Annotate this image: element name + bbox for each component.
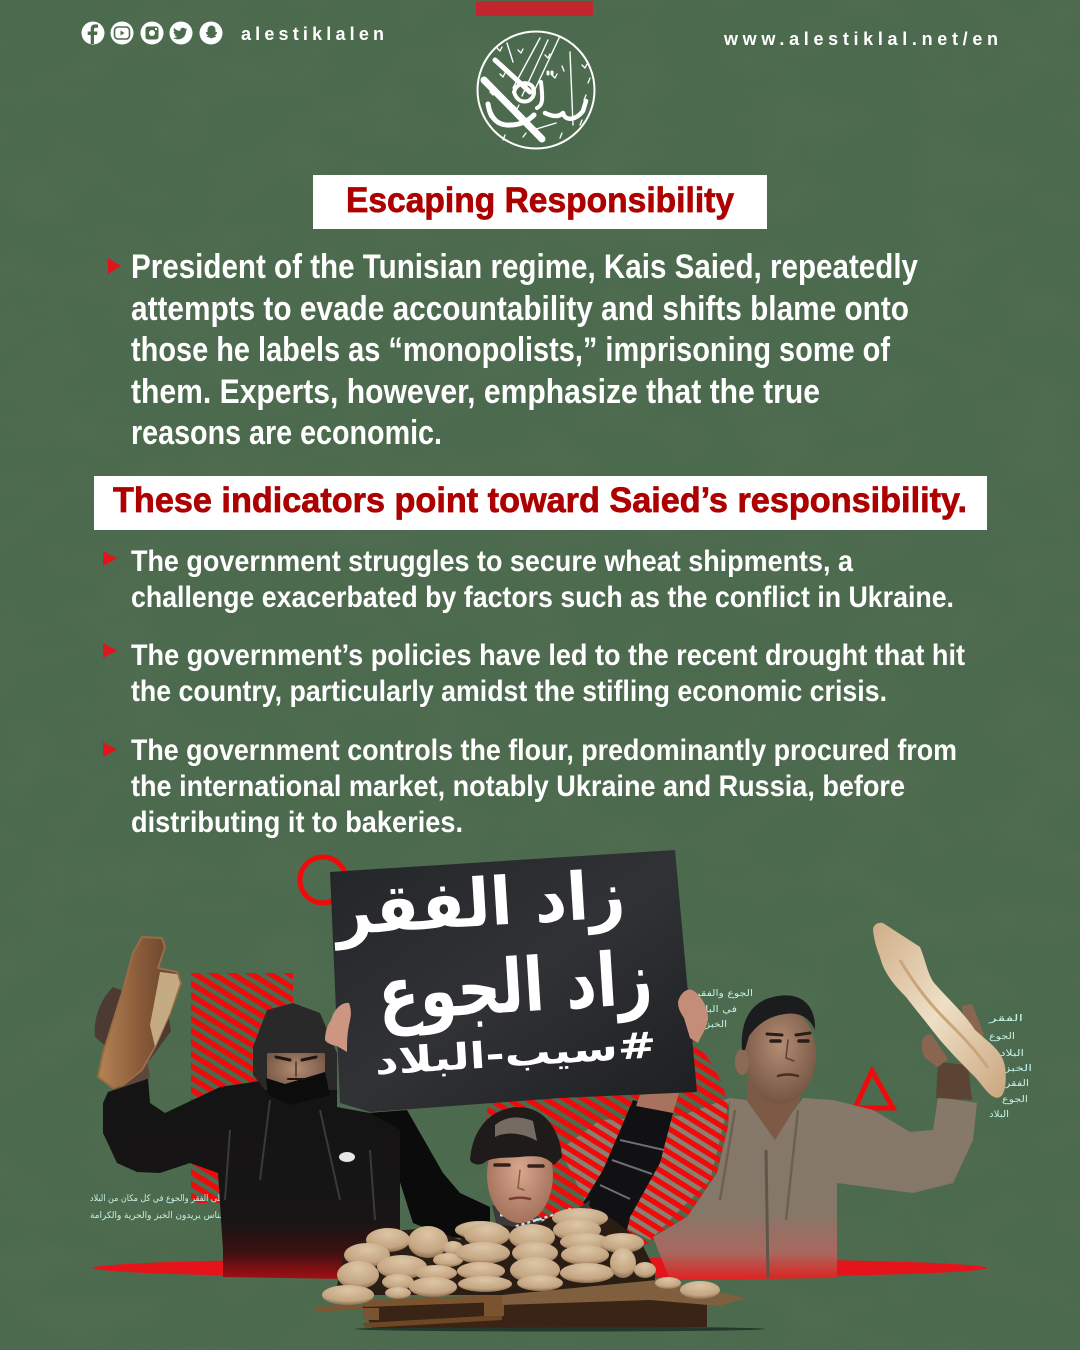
girl forearm	[636, 1090, 680, 1113]
paragraph text: them. Experts, however, emphasize that the true	[131, 373, 820, 411]
handwritten scribbles top right	[694, 989, 753, 1030]
bullet 1 text: The government struggles to secure wheat shipments, a	[131, 545, 853, 578]
bullet 3 text: the international market, notably Ukraine and Russia, before	[131, 770, 905, 803]
icon: facebook	[82, 22, 104, 44]
icon: bullet marker	[103, 742, 117, 757]
heading box: Escaping Responsibility	[313, 175, 767, 229]
protest sign: زاد الفقر	[330, 856, 627, 951]
paragraph text	[131, 248, 918, 452]
icon: instagram	[140, 22, 164, 44]
hoodie strings	[720, 1110, 798, 1220]
ear	[735, 1049, 749, 1075]
jacket badge	[339, 1152, 355, 1162]
bread	[98, 937, 181, 1088]
hand: right on sign	[678, 990, 708, 1043]
hair	[742, 995, 815, 1050]
protest sign	[330, 850, 697, 1112]
handwritten scribbles right	[987, 1014, 1032, 1120]
bullet 2: drought	[103, 639, 965, 708]
face	[744, 1006, 816, 1104]
hand	[95, 987, 171, 1061]
red ring	[300, 857, 346, 903]
bullet 2 text: The government’s policies have led to the recent drought that hit	[131, 639, 965, 672]
mask	[266, 1072, 330, 1105]
handwritten scribbles right: الفقر	[987, 1014, 1023, 1024]
heading box: Escaping Responsibility: Escaping Responsibility	[346, 181, 735, 220]
pallet	[362, 1298, 707, 1328]
girl features	[495, 1165, 543, 1199]
handle text: alestiklalen	[241, 24, 384, 44]
paragraph text: attempts to evade accountability and shifts blame onto	[131, 290, 909, 328]
red ground ellipse	[93, 1258, 987, 1278]
icon: bullet marker	[103, 551, 117, 566]
bullet 1 text	[131, 545, 954, 614]
girl right sleeve	[583, 1100, 673, 1230]
bullet 3 text	[131, 734, 957, 839]
logo: calligraphy roundel	[478, 32, 594, 148]
shadow	[355, 1326, 765, 1332]
figure: girl	[367, 1090, 680, 1240]
handwritten scribbles right: البلاد	[1000, 1049, 1024, 1059]
top red bar	[476, 1, 593, 16]
hand: left on sign	[325, 1003, 351, 1052]
protest sign: زاد الجوع	[375, 935, 655, 1039]
handwritten scribbles left: على الفقر والجوع في كل مكان من البلاد	[90, 1194, 225, 1204]
icon: snapchat	[200, 22, 222, 44]
paragraph text: President of the Tunisian regime, Kais Saied, repeatedly	[131, 248, 918, 286]
face features	[276, 1057, 316, 1079]
handwritten scribbles left	[90, 1194, 225, 1221]
girl left sleeve	[367, 1110, 490, 1240]
handwritten scribbles top right: الجوع والفقر	[694, 989, 753, 999]
intro paragraph	[108, 248, 918, 452]
handwritten scribbles right: الخبز	[1003, 1064, 1032, 1074]
zipper	[766, 1150, 768, 1278]
jacket	[103, 1078, 402, 1280]
striped rectangle	[191, 973, 293, 1203]
bread	[873, 923, 1006, 1098]
scarf	[492, 1200, 590, 1240]
bullet 3 text: The government controls the flour, predominantly procured from	[131, 734, 957, 767]
bullet 1 text: challenge exacerbated by factors such as the conflict in Ukraine.	[131, 581, 954, 614]
girl hair	[470, 1107, 562, 1165]
figure: right man	[653, 923, 1006, 1280]
icon: bullet marker	[103, 643, 117, 658]
hood	[253, 1003, 337, 1090]
icon: twitter	[170, 22, 192, 44]
dark backing behind loaves	[335, 1210, 655, 1295]
bullet 3: flour	[103, 734, 957, 839]
jacket highlights	[225, 1100, 375, 1220]
website url: www.alestiklal.net/en	[723, 29, 998, 49]
forearm	[936, 1062, 972, 1100]
facial features	[767, 1033, 810, 1076]
bullet 3 text: distributing it to bakeries.	[131, 806, 463, 839]
handwritten scribbles right: الفقر	[1004, 1079, 1029, 1089]
wrist	[115, 1050, 150, 1090]
handwritten scribbles right: البلاد	[989, 1110, 1009, 1120]
handwritten scribbles top right: في البلاد	[697, 1005, 737, 1015]
handwritten scribbles right: الجوع	[1002, 1095, 1028, 1105]
red triangle	[855, 1071, 893, 1108]
handwritten scribbles left: الناس يريدون الخبز والحرية والكرامة	[90, 1211, 225, 1221]
paragraph text: those he labels as “monopolists,” imprisoning some of	[131, 331, 891, 369]
bullet 2 text	[131, 639, 965, 708]
icon: bullet marker	[108, 258, 121, 274]
bullet 2 text: the country, particularly amidst the stifling economic crisis.	[131, 675, 887, 708]
illustration: protest collage	[90, 850, 1032, 1332]
subheading box: indicators: These indicators point toward Saied’s responsibility.	[113, 481, 967, 520]
hoodie shoulder behind stripes	[560, 1098, 730, 1240]
bullet 1: wheat shipments	[103, 545, 954, 614]
figure: left man	[95, 937, 402, 1280]
protest sign: #سيب-البلاد	[374, 1025, 658, 1083]
handwritten scribbles right: الجوع	[989, 1032, 1015, 1042]
handwritten scribbles top right: الخبز	[704, 1020, 727, 1030]
bread loaves	[322, 1208, 720, 1305]
bread pile and pallet	[314, 1208, 765, 1332]
social icons	[82, 22, 222, 44]
hoodie	[653, 1097, 977, 1280]
paragraph text: reasons are economic.	[131, 414, 442, 452]
girl face	[487, 1127, 553, 1223]
face	[267, 1053, 325, 1092]
hand on bread	[922, 1034, 948, 1067]
neck	[747, 1075, 800, 1140]
striped circle	[486, 1006, 730, 1250]
fingers behind bread	[962, 1004, 984, 1044]
icon: youtube	[110, 22, 134, 44]
